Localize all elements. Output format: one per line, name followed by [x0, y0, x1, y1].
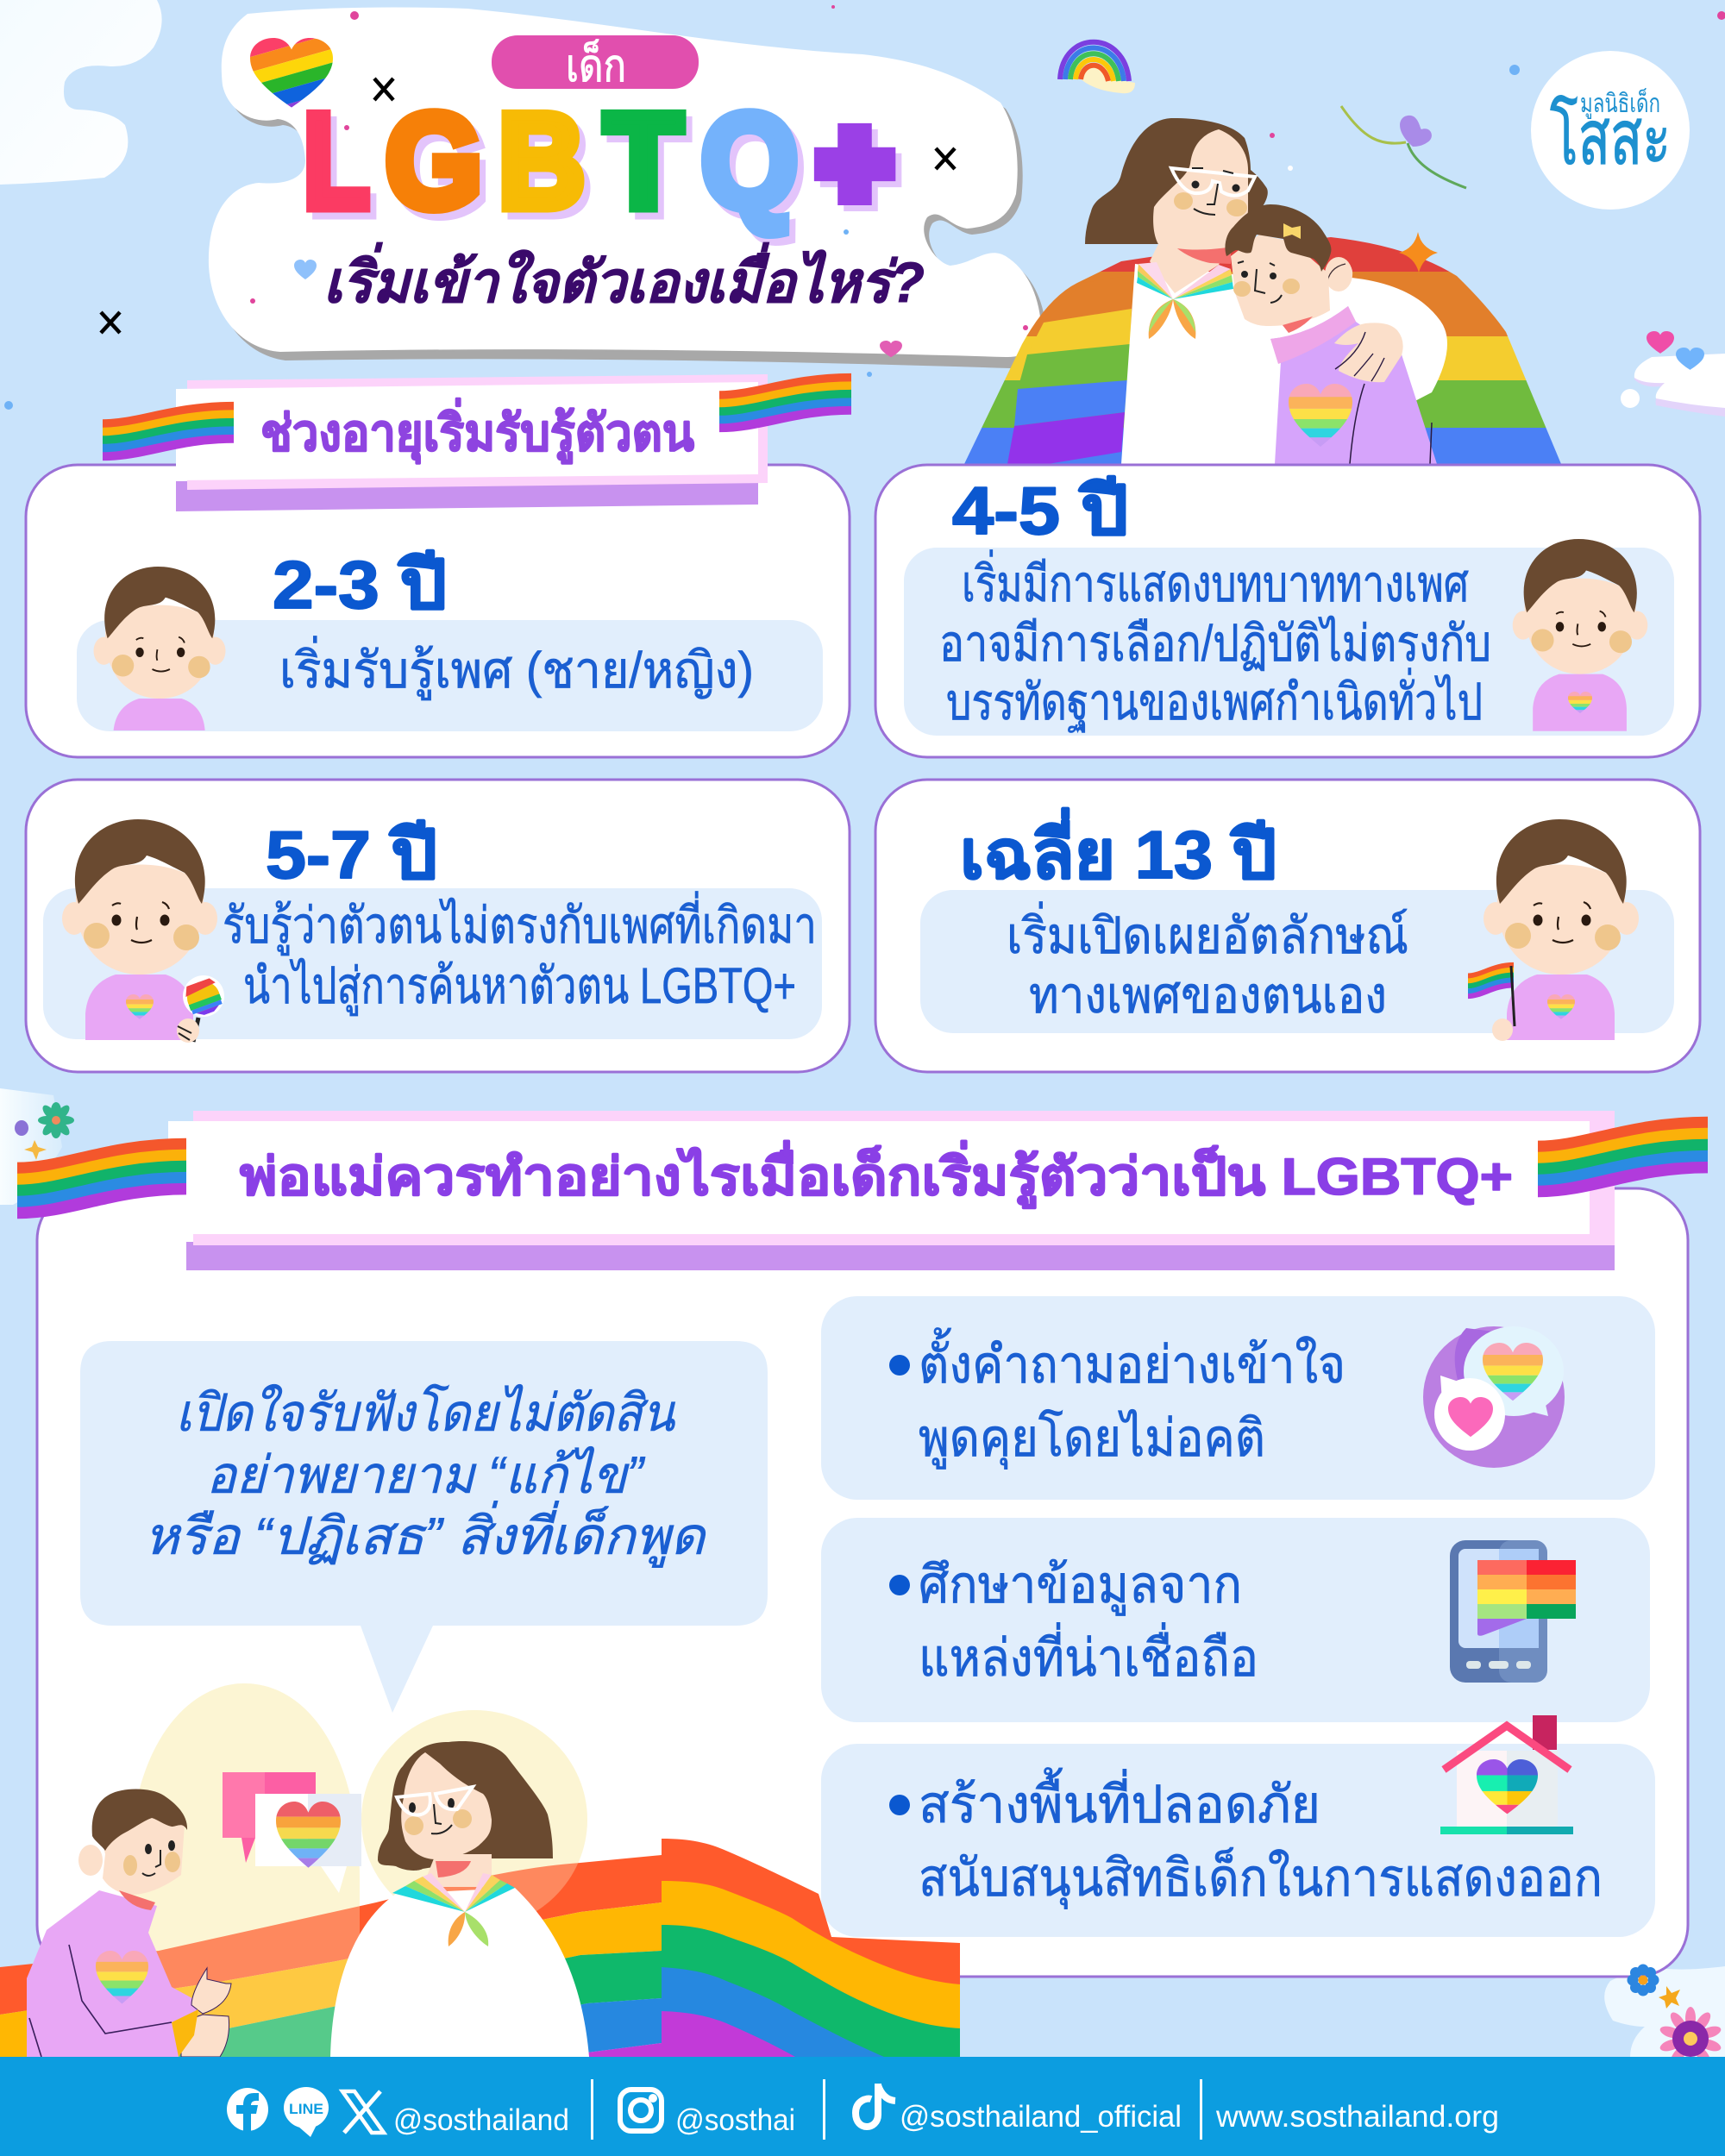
footer bar: @sosthailand_official — [900, 2100, 1182, 2134]
speech bubble: เปิดใจรับฟังโดยไม่ตัดสิน — [176, 1383, 676, 1442]
panel: 4-5 years: อาจมีการเลือก/ปฏิบัติไม่ตรงกับ — [939, 615, 1491, 672]
panel: 4-5 years: 4-5 ปี — [952, 473, 1128, 548]
pill: เด็ก: เด็ก — [566, 40, 626, 91]
cloud: bottom right — [1604, 1966, 1725, 2057]
footer bar: @sosthailand — [393, 2103, 569, 2137]
title: LGBTQ+: B — [505, 93, 591, 242]
panel: 4-5 years — [875, 465, 1700, 757]
icon: phone with rainbow bubble — [1450, 1540, 1576, 1683]
icon: small pink heart — [880, 341, 902, 357]
icon: tiktok — [856, 2084, 895, 2127]
footer bar: www.sosthailand.org — [1215, 2100, 1499, 2134]
icon: flowers left — [15, 1102, 74, 1160]
panel: 5-7 years: รับรู้ว่าตัวตนไม่ตรงกับเพศที่เกิดมา — [223, 891, 817, 956]
title: LGBTQ+: T — [605, 86, 682, 235]
heading: age range — [103, 374, 851, 511]
panel: average 13 years: ทางเพศของตนเอง — [1029, 968, 1387, 1024]
tip: create safe space: สนับสนุนสิทธิเด็กในการแสดงออก — [919, 1847, 1603, 1909]
title: LGBTQ+: Q — [701, 86, 798, 235]
pill: เด็ก — [492, 35, 699, 91]
panel: average 13 years: เริ่มเปิดเผยอัตลักษณ์ — [1007, 901, 1408, 964]
title: LGBTQ+: T — [611, 93, 688, 242]
title: LGBTQ+: G — [392, 93, 488, 242]
tip: study reliable sources — [821, 1518, 1650, 1722]
icon: instagram — [620, 2090, 662, 2131]
panel: 2-3 years: เริ่มรับรู้เพศ (ชาย/หญิง) — [279, 636, 754, 700]
logo: มูลนิธิเด็กโสสะ: มูลนิธิเด็ก — [1580, 87, 1660, 119]
title: LGBTQ+: + — [819, 95, 890, 230]
icon: flowers bottom right — [1627, 1965, 1722, 2067]
tip: study reliable sources: แหล่งที่น่าเชื่อถือ — [919, 1622, 1258, 1687]
title: LGBTQ+ — [304, 86, 896, 242]
panel: average 13 years: เฉลี่ย 13 ปี — [960, 807, 1276, 893]
logo: มูลนิธิเด็กโสสะ: โสสะ — [1550, 95, 1671, 180]
footer bar — [0, 2057, 1725, 2156]
title: LGBTQ+: B — [499, 86, 585, 235]
illustration: parent and child with rainbow — [0, 1683, 960, 2061]
tip: create safe space: สร้างพื้นที่ปลอดภัย — [919, 1767, 1320, 1833]
panel: 5-7 years — [26, 780, 850, 1072]
panel: 5-7 years: 5-7 ปี — [266, 817, 437, 893]
tip: ask with understanding: พูดคุยโดยไม่อคติ — [919, 1408, 1265, 1470]
panel: what parents should do — [37, 1188, 1688, 1977]
cloud: left of section two — [0, 1088, 62, 1205]
tip: study reliable sources: ศึกษาข้อมูลจาก — [919, 1556, 1242, 1616]
heading: age range: ช่วงอายุเริ่มรับรู้ตัวตน — [260, 398, 694, 465]
icon: line — [284, 2087, 329, 2137]
icon: x — [342, 2091, 384, 2133]
title bubble — [209, 7, 1046, 368]
logo: มูลนิธิเด็กโสสะ — [1531, 51, 1690, 210]
tip: create safe space — [821, 1744, 1655, 1937]
tip: ask with understanding — [821, 1296, 1655, 1500]
cloud: top left — [0, 0, 162, 185]
footer bar: @sosthai — [675, 2103, 795, 2137]
speech bubble: หรือ “ปฏิเสธ” สิ่งที่เด็กพูด — [144, 1501, 707, 1568]
confetti marks — [4, 5, 1725, 463]
panel: 4-5 years: เริ่มมีการแสดงบทบาททางเพศ — [962, 549, 1469, 612]
title: LGBTQ+: Q — [707, 93, 804, 242]
icon: chat hearts — [1423, 1326, 1565, 1468]
panel: 2-3 years — [26, 465, 850, 757]
speech bubble: อย่าพยายาม “แก้ไข” — [206, 1446, 646, 1504]
icon: line: LINE — [289, 2101, 323, 2117]
tip: ask with understanding: ตั้งคำถามอย่างเข้าใจ — [919, 1327, 1346, 1394]
icon: house with heart — [1440, 1715, 1573, 1834]
panel: 5-7 years: นำไปสู่การค้นหาตัวตน LGBTQ+ — [243, 957, 796, 1016]
panel: average 13 years — [875, 780, 1700, 1072]
icon: mini rainbow — [1060, 42, 1135, 93]
marks: crosses — [101, 78, 955, 333]
title: LGBTQ+: G — [386, 86, 482, 235]
panel: 2-3 years: 2-3 ปี — [273, 547, 447, 623]
heading: what parents should do: พ่อแม่ควรทำอย่างไรเมื่อเด็กเริ่มรู้ตัวว่าเป็น LGBTQ+ — [240, 1140, 1513, 1209]
icon: facebook — [227, 2088, 268, 2131]
title: LGBTQ+: L — [304, 86, 369, 235]
subtitle: เริ่มเข้าใจตัวเองเมื่อไหร่? — [323, 242, 925, 314]
illustration: mother and child in rainbow flag — [949, 118, 1570, 471]
icon: small blue heart — [294, 260, 317, 279]
title: LGBTQ+: L — [310, 93, 375, 242]
panel: 4-5 years: บรรทัดฐานของเพศกำเนิดทั่วไป — [946, 667, 1483, 732]
heading: what parents should do — [17, 1111, 1708, 1270]
icon: rainbow heart — [250, 38, 333, 107]
cloud: right side with hearts — [1621, 331, 1725, 417]
icon: heart with ribbon — [1341, 106, 1466, 188]
title: LGBTQ+: + — [825, 101, 896, 236]
speech bubble — [80, 1341, 768, 1713]
